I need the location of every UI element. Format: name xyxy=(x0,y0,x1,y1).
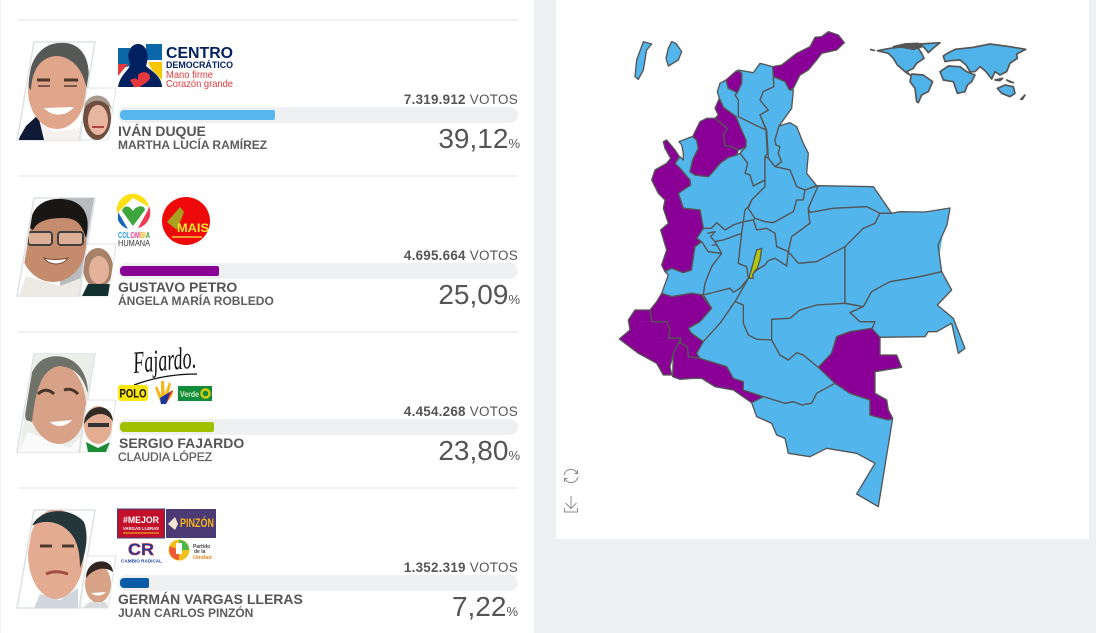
names: SERGIO FAJARDO xyxy=(119,435,244,451)
department: Córdoba xyxy=(690,118,738,177)
departments: Caldas, Risaralda, Quindío xyxy=(697,222,743,253)
photos: Fajardo and López xyxy=(16,353,116,453)
logos: Mejor Vargas Lleras, Pinzón, Cambio Radical, La U: PINZÓN xyxy=(180,515,214,530)
department: Nariño xyxy=(619,310,681,375)
candidate row: Gustavo Petro xyxy=(16,194,520,310)
votes: 4.454.268 VOTOS xyxy=(404,404,518,419)
logos: Colombia Humana and MAIS: COLOMBIA xyxy=(118,231,150,240)
logo: Centro Democrático: Mano firme xyxy=(166,69,213,81)
logos: Mejor Vargas Lleras, Pinzón, Cambio Radical, La U: de la xyxy=(194,549,206,555)
logo: Centro Democrático: Corazón grande xyxy=(166,78,233,90)
signature: Fajardo. xyxy=(131,340,197,380)
progress bar xyxy=(118,419,518,435)
department: Atlántico xyxy=(726,71,742,93)
logos: Fajardo, Polo, hand, Verde xyxy=(118,340,212,404)
department: Tolima xyxy=(703,233,748,303)
department: Putumayo xyxy=(673,343,763,403)
logos: Colombia Humana and MAIS: MAIS xyxy=(177,221,209,235)
department: Valle del Cauca xyxy=(662,242,722,297)
panel: candidates xyxy=(1,0,534,633)
progress bar xyxy=(118,107,518,123)
department: Cesar xyxy=(760,77,793,167)
logos: Mejor Vargas Lleras, Pinzón, Cambio Radical, La U: Unidad xyxy=(193,555,212,561)
department: Chocó xyxy=(652,140,703,273)
logos: Mejor Vargas Lleras, Pinzón, Cambio Radical, La U: #MEJOR xyxy=(123,515,159,525)
world inset map xyxy=(870,43,1026,103)
names: GERMÁN VARGAS LLERAS xyxy=(118,591,303,607)
logos: Fajardo, Polo, hand, Verde: POLO xyxy=(120,388,147,400)
department: Bolívar xyxy=(717,80,767,186)
department: Norte de Santander xyxy=(775,123,817,190)
logo: Centro Democrático: CENTRO xyxy=(166,45,233,62)
island: Providencia xyxy=(666,42,682,66)
percentage: 25,09% xyxy=(438,279,520,310)
department: Guainía xyxy=(850,272,965,353)
department: Magdalena xyxy=(735,63,774,130)
candidate row: Sergio Fajardo xyxy=(16,340,520,466)
department: Caquetá xyxy=(697,302,835,405)
Bogotá xyxy=(749,248,762,278)
logos: Mejor Vargas Lleras, Pinzón, Cambio Radical, La U: Partido xyxy=(193,544,210,550)
logo: Centro Democrático: DEMOCRÁTICO xyxy=(166,60,233,71)
department: Sucre xyxy=(715,98,746,150)
logos: Colombia Humana and MAIS xyxy=(116,194,210,248)
logo: Centro Democrático xyxy=(118,44,233,90)
icon: refresh xyxy=(564,468,578,484)
department: Cauca xyxy=(650,293,712,358)
logos: Colombia Humana and MAIS: HUMANA xyxy=(118,239,151,248)
department: Arauca xyxy=(808,186,892,213)
percentage: 39,12% xyxy=(438,123,520,154)
candidate row: Germán Vargas Lleras xyxy=(16,508,518,622)
logos: Mejor Vargas Lleras, Pinzón, Cambio Radical, La U: CAMBIO RADICAL xyxy=(121,558,162,564)
department: Vichada xyxy=(845,208,950,307)
department: Meta xyxy=(735,247,845,340)
names: IVÁN DUQUE xyxy=(118,123,206,139)
department: Cundinamarca xyxy=(738,220,788,278)
logos: Mejor Vargas Lleras, Pinzón, Cambio Radical, La U: CR xyxy=(128,540,154,559)
department: Huila xyxy=(688,278,748,342)
candidate row: Sergio Fajardo: CLAUDIA LÓPEZ xyxy=(118,450,212,464)
photos: Petro and Robledo xyxy=(16,197,116,297)
percentage: 23,80% xyxy=(438,435,520,466)
progress bar xyxy=(118,263,518,279)
candidate row: Iván Duque: MARTHA LUCÍA RAMÍREZ xyxy=(118,138,267,152)
progress bar xyxy=(118,575,518,591)
department: Antioquia xyxy=(675,137,765,230)
votes: 7.319.912 VOTOS xyxy=(404,92,518,107)
logos: Mejor Vargas Lleras, Pinzón, Cambio Radical, La U: VARGAS LLERAS xyxy=(123,526,159,531)
percentage: 7,22% xyxy=(452,591,518,622)
department: La Guajira xyxy=(773,32,844,90)
candidate row: Iván Duque xyxy=(16,41,520,154)
department: Guaviare xyxy=(772,303,875,367)
votes: 1.352.319 VOTOS xyxy=(404,560,518,575)
icon: download xyxy=(564,496,578,512)
department: Vaupés xyxy=(818,328,902,420)
logos: Fajardo, Polo, hand, Verde: Verde xyxy=(180,390,199,399)
votes: 4.695.664 VOTOS xyxy=(404,248,518,263)
department: Santander xyxy=(748,157,805,223)
photos: Vargas Lleras and Pinzón xyxy=(16,509,116,609)
candidate row: Germán Vargas Lleras: JUAN CARLOS PINZÓN xyxy=(118,606,253,620)
names: GUSTAVO PETRO xyxy=(118,279,237,295)
department: Boyacá xyxy=(753,186,818,252)
department: Casanare xyxy=(788,207,880,263)
logos: Mejor Vargas Lleras, Pinzón, Cambio Radical, La U xyxy=(117,508,216,564)
candidate row: Gustavo Petro: ÁNGELA MARÍA ROBLEDO xyxy=(118,294,274,308)
panel: map xyxy=(556,0,1089,539)
island: San Andrés xyxy=(635,42,652,79)
photos: Duque and Ramírez xyxy=(16,41,116,141)
department: Amazonas xyxy=(752,383,893,507)
